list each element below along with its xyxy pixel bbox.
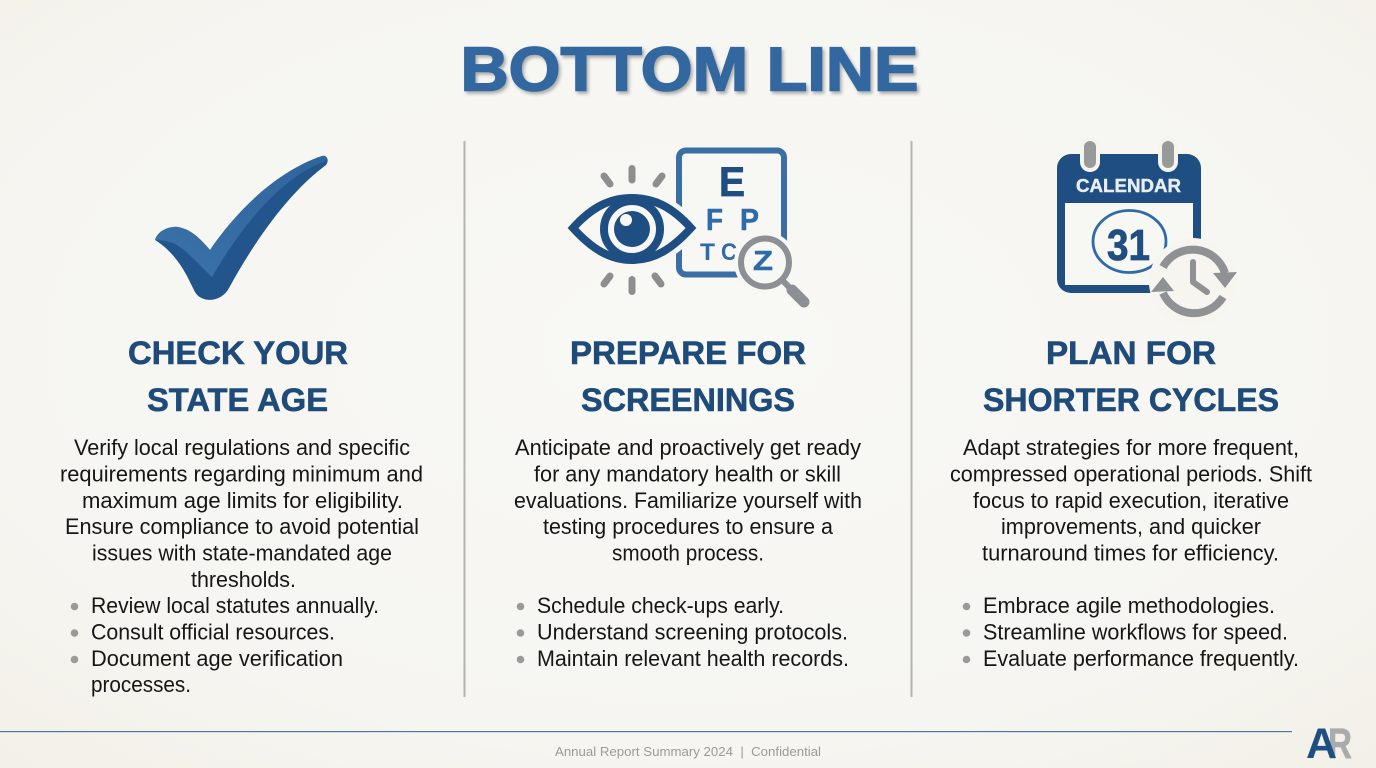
icon: calendar and clock: 31 [1107, 221, 1150, 270]
logo: AR: R [1328, 720, 1352, 768]
list: state age actions: Review local statutes annually. [91, 593, 379, 618]
icon: eye and eye chart: Z [753, 245, 773, 276]
list: state age actions: Document age verification [91, 646, 343, 671]
panel: plan for shorter cycles [950, 137, 1312, 671]
text: state age description: maximum age limits for eligibility. [82, 488, 403, 513]
text: screenings description: Anticipate and proactively get ready [515, 435, 861, 460]
heading: prepare for screenings: PREPARE FOR [570, 335, 806, 371]
text: state age description: requirements regarding minimum and [60, 462, 423, 486]
icon: check mark [155, 156, 328, 300]
list: state age actions [71, 593, 379, 697]
text: shorter cycles description [950, 435, 1312, 566]
icon: calendar and clock [1057, 137, 1237, 326]
list: shorter cycle actions: Streamline workflows for speed. [983, 620, 1288, 644]
heading: plan for shorter cycles: SHORTER CYCLES [983, 382, 1279, 418]
list: screening actions: Understand screening protocols. [537, 620, 848, 644]
logo: AR: A [1306, 720, 1337, 768]
heading: prepare for screenings: SCREENINGS [581, 382, 795, 418]
text: state age description: Ensure compliance to avoid potential [65, 514, 419, 539]
heading: check your state age [128, 335, 348, 418]
heading: check your state age: STATE AGE [147, 382, 328, 418]
list: screening actions [517, 593, 849, 671]
icon: eye and eye chart: F [706, 202, 723, 237]
list: shorter cycle actions: Evaluate performance frequently. [983, 646, 1299, 671]
text: shorter cycles description: compressed operational periods. Shift [950, 462, 1312, 486]
text: screenings description [514, 435, 862, 566]
text: shorter cycles description: turnaround times for efficiency. [982, 540, 1279, 566]
panel: prepare for screenings [514, 150, 862, 671]
text: state age description: Verify local regulations and specific [74, 435, 410, 460]
text: state age description: issues with state-mandated age [92, 540, 392, 566]
text: state age description: thresholds. [191, 567, 296, 592]
text: shorter cycles description: Adapt strategies for more frequent, [963, 435, 1299, 460]
text: shorter cycles description: focus to rapid execution, iterative [973, 488, 1289, 513]
list: state age actions: Consult official resources. [91, 620, 335, 644]
text: screenings description: smooth process. [612, 540, 764, 566]
text: screenings description: for any mandatory health or skill [534, 462, 841, 486]
list: screening actions: Maintain relevant health records. [537, 646, 849, 671]
icon: eye and eye chart: E [719, 158, 745, 205]
heading: plan for shorter cycles: PLAN FOR [1046, 335, 1216, 371]
footer text: Annual Report Summary 2024 | Confidential [555, 744, 821, 759]
list: screening actions: Schedule check-ups early. [537, 593, 784, 618]
text: state age description [60, 435, 423, 592]
icon: eye and eye chart: P [740, 202, 759, 237]
panel: check your state age [60, 156, 423, 697]
heading: prepare for screenings [570, 335, 806, 418]
title: BOTTOM LINE [460, 36, 918, 104]
text: screenings description: testing procedures to ensure a [543, 514, 834, 539]
list: shorter cycle actions [963, 593, 1299, 671]
text: screenings description: evaluations. Familiarize yourself with [514, 488, 862, 513]
icon: eye and eye chart: C [721, 239, 737, 266]
list: state age actions: processes. [91, 672, 191, 697]
icon: eye and eye chart: T [700, 239, 715, 266]
text: shorter cycles description: improvements, and quicker [1001, 514, 1261, 539]
heading: plan for shorter cycles [983, 335, 1279, 418]
icon: eye and eye chart [573, 150, 804, 302]
heading: check your state age: CHECK YOUR [128, 335, 348, 371]
logo: AR [1306, 720, 1352, 768]
icon: calendar and clock: CALENDAR [1076, 176, 1181, 196]
list: shorter cycle actions: Embrace agile methodologies. [983, 593, 1275, 618]
